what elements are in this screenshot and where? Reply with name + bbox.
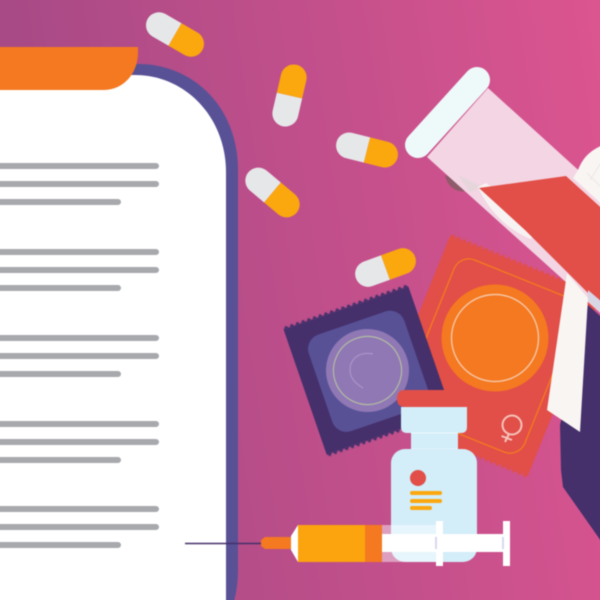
needle (185, 542, 261, 544)
vial body (391, 449, 477, 562)
text lines: block 5 (0, 509, 156, 545)
icon: pill 4 (240, 162, 305, 223)
barrel empty (382, 525, 437, 562)
glove fingertip (458, 175, 483, 192)
coat white lapel (547, 273, 588, 432)
vial label lines (412, 493, 440, 508)
icon: condom inner arc (350, 353, 373, 388)
tube body (427, 88, 600, 320)
clipboard clip (0, 47, 138, 90)
icon: orange condom ring (442, 284, 548, 392)
icon: hand behind tube (445, 175, 475, 191)
tip (291, 525, 298, 562)
icon: pill 2 (270, 62, 309, 129)
icon: pill 1 (141, 7, 209, 62)
text lines: block 3 (0, 338, 156, 374)
icon: purple condom packet (283, 284, 452, 457)
text lines: block 2 (0, 252, 156, 288)
coat navy torso (560, 305, 600, 551)
tube cap (418, 80, 477, 145)
icon: test tube (418, 80, 600, 320)
vial cap (397, 390, 468, 407)
icon: female symbol (502, 416, 522, 442)
flange 1 (436, 521, 443, 566)
text lines: block 4 (0, 424, 156, 460)
plunger (382, 534, 505, 552)
hub (261, 537, 291, 549)
icon: red female condom packet (377, 233, 600, 478)
tube base (588, 290, 600, 320)
flange 2 (503, 521, 510, 566)
red liquid (479, 176, 600, 313)
plunger marks (436, 537, 503, 549)
barrel liquid (298, 525, 365, 562)
icon: syringe (185, 521, 510, 566)
glove sliver (478, 183, 540, 239)
text lines: block 1 (0, 166, 156, 202)
icon: vial (391, 390, 477, 562)
vial label dot (410, 470, 426, 486)
vial neck (401, 407, 467, 449)
icon: pill 5 (351, 245, 420, 290)
coat shoulder (573, 143, 600, 210)
panel: clipboard sheet (0, 64, 238, 600)
icon: pill 3 (333, 130, 401, 170)
